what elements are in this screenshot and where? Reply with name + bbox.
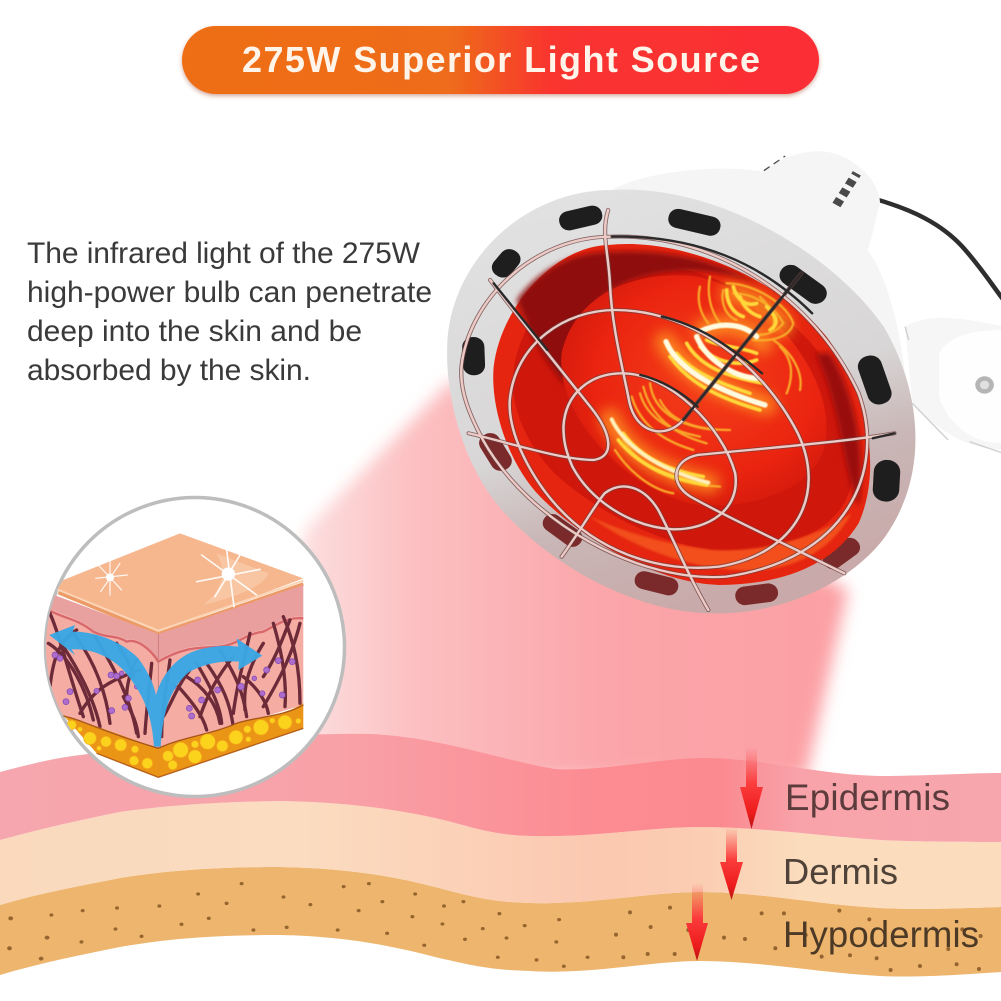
filament glow <box>610 293 783 483</box>
fat layer <box>63 715 158 777</box>
rim vent slots <box>462 204 901 606</box>
label: Hypodermis: Hypodermis <box>783 914 979 955</box>
label: Dermis: Dermis <box>783 851 898 892</box>
wire highlight strokes <box>461 210 894 610</box>
top face <box>57 533 303 633</box>
blue penetration arrows <box>49 625 262 747</box>
arrow: to hypodermis <box>686 883 708 961</box>
skin cube <box>43 533 303 777</box>
layer: hypodermis <box>0 867 1001 977</box>
light beam <box>262 380 848 778</box>
sparkles <box>96 550 260 607</box>
lipid clusters <box>52 652 295 719</box>
title pill <box>182 26 819 94</box>
illustration: skin cube in circle <box>43 498 344 796</box>
dermis faces <box>43 607 158 748</box>
wall bracket <box>905 318 1001 453</box>
orange coils <box>615 277 801 493</box>
bulb filament <box>610 277 801 493</box>
layer: epidermis <box>0 734 1001 842</box>
body paragraph: high-power bulb can penetrate <box>27 276 432 309</box>
yellow coils <box>618 287 776 485</box>
label: Epidermis: Epidermis <box>785 777 950 818</box>
dark wire sections <box>494 237 894 438</box>
lamp <box>447 151 1001 613</box>
wire shadow strokes <box>461 210 894 610</box>
collagen fibers <box>48 613 300 737</box>
power cord <box>878 200 1001 300</box>
epidermis faces <box>47 593 158 660</box>
reflector rim <box>447 190 915 613</box>
lamp housing <box>612 151 908 473</box>
skin layers <box>0 734 1001 977</box>
white hot coils <box>612 325 765 483</box>
body paragraph: absorbed by the skin. <box>27 354 311 387</box>
layer: dermis <box>0 801 1001 909</box>
red reflector interior <box>493 244 870 585</box>
arrow: to dermis <box>720 827 743 900</box>
wire guard <box>461 210 894 610</box>
body paragraph <box>27 237 432 387</box>
circle badge <box>46 498 344 796</box>
title pill: 275W Superior Light Source <box>242 39 760 80</box>
body paragraph: The infrared light of the 275W <box>27 237 421 270</box>
body paragraph: deep into the skin and be <box>27 315 362 348</box>
arrow: to epidermis <box>740 747 763 829</box>
